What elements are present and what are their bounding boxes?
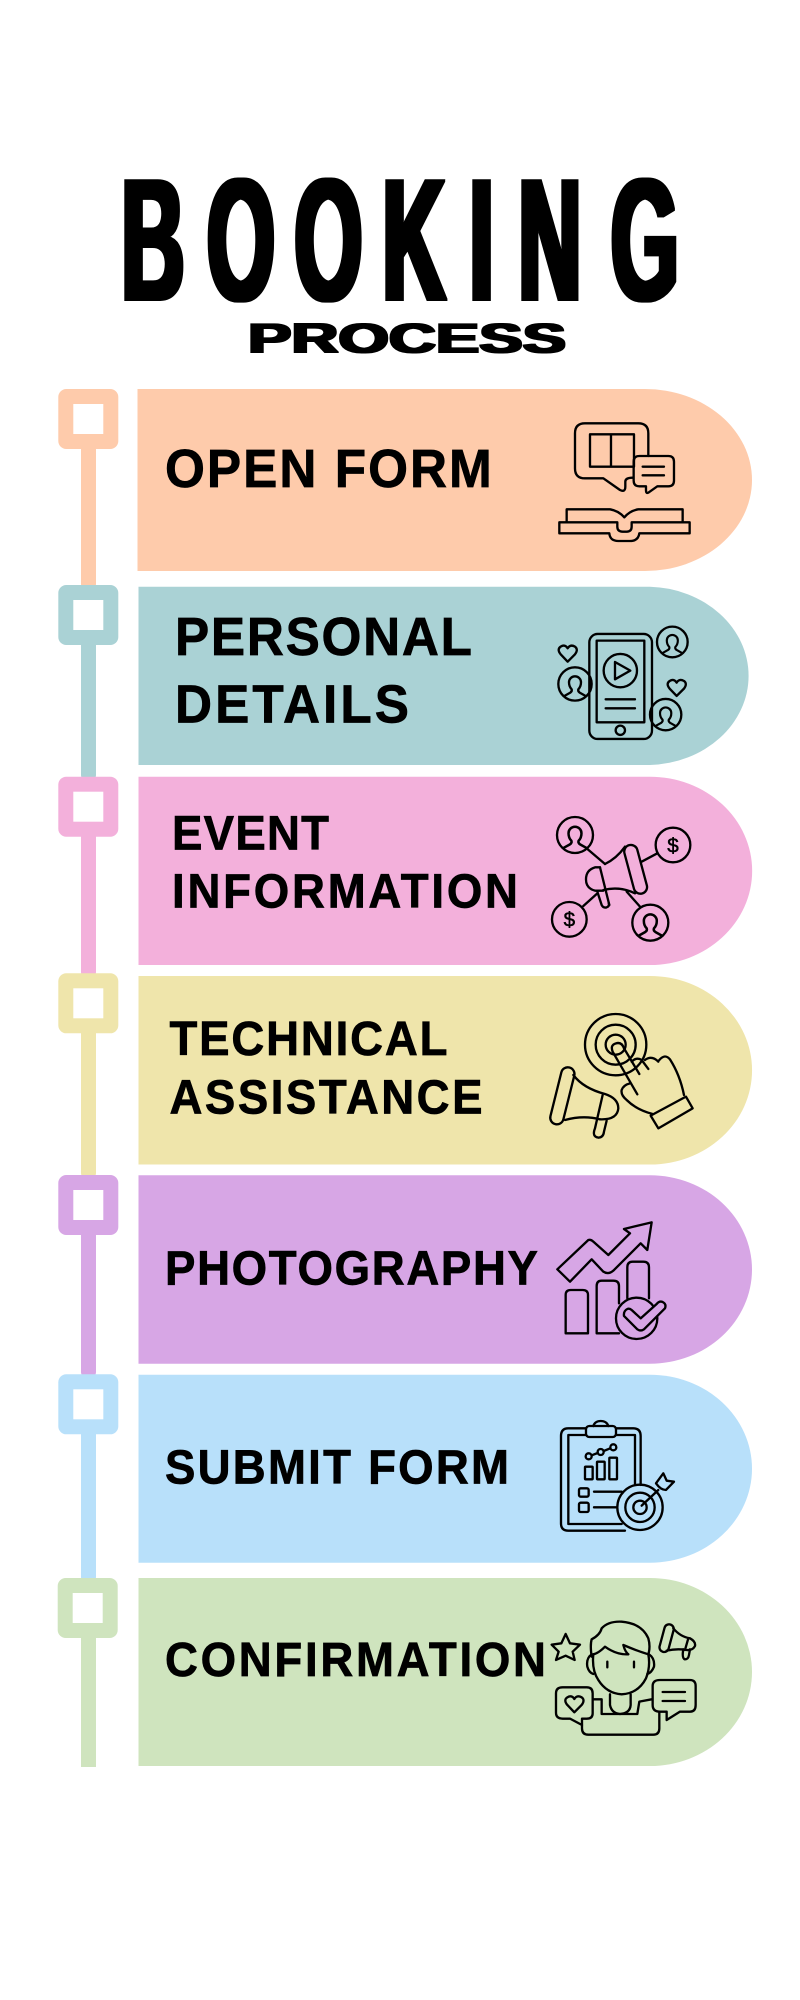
label: PERSONAL [175,607,472,667]
icon: dollar signs [564,834,679,932]
icon: dollar signs: $ [667,834,679,857]
timeline node 7 [58,1578,118,1767]
icon: growth chart with check [557,1222,665,1339]
icon: clipboard and target [561,1421,674,1531]
label: INFORMATION [172,865,518,918]
timeline node 4 [58,973,118,1179]
panel: open form [138,389,752,571]
label: DETAILS [175,675,409,735]
icon: megaphone network [552,817,690,941]
label: OPEN FORM [165,439,492,499]
timeline node 6 [58,1374,118,1583]
label [172,806,518,918]
panel: photography [138,1175,752,1364]
title [122,143,679,362]
icon: tap target and megaphone [549,1014,693,1138]
label: PHOTOGRAPHY [165,1241,538,1295]
timeline [58,389,118,1767]
panel: confirmation [138,1578,752,1766]
icon: person with social bubbles [552,1622,696,1735]
label: CONFIRMATION [165,1633,546,1686]
timeline node 1 [58,389,118,590]
panel: event information [138,777,752,965]
timeline node 3 [58,777,118,978]
label: EVENT [172,806,329,860]
timeline node 5 [58,1175,118,1378]
label [175,607,472,735]
label: TECHNICAL [170,1012,447,1065]
subheading: process: PROCESS [248,315,566,362]
timeline node 2 [58,585,118,781]
icon: dollar signs: $ [564,909,576,932]
label: SUBMIT FORM [165,1440,509,1494]
label [170,1012,483,1124]
panel: technical assistance [138,976,752,1164]
panel: personal details [138,587,749,765]
label: ASSISTANCE [170,1070,483,1124]
heading: booking: BOOKING [122,143,679,338]
panel: submit form [138,1375,752,1563]
icon: book and chat bubbles [559,423,690,541]
icon: phone video and followers [558,627,688,739]
